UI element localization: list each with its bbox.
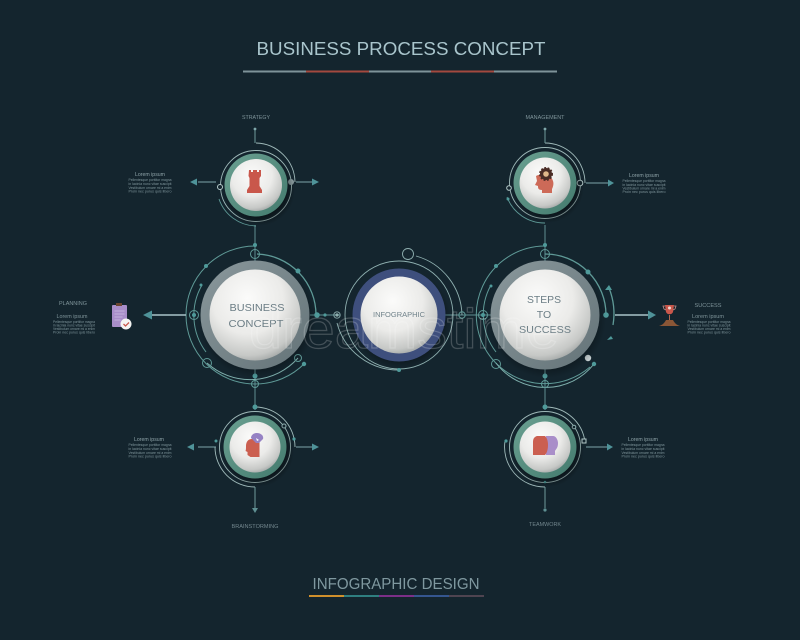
green ring [514, 152, 576, 214]
text block: planning: PLANNING [59, 301, 87, 307]
node: infographic [323, 248, 462, 372]
green ring [224, 154, 288, 216]
sphere [230, 422, 280, 472]
label [228, 302, 284, 330]
orbit rings [505, 407, 585, 487]
text block: brainstorming: Lorem ipsum [134, 437, 164, 443]
text block: success: SUCCESS [694, 303, 722, 309]
icon: head with gear [535, 168, 553, 193]
sphere [520, 158, 570, 208]
sphere [500, 270, 590, 360]
sphere [210, 270, 300, 360]
text block: brainstorming: in lacinia nunc vitae suscipit [128, 447, 172, 451]
text block: planning: Pellentesque porttitor magna [53, 320, 95, 324]
orbit rings [459, 246, 614, 388]
text block: planning: in lacinia nunc vitae suscipit [53, 324, 95, 328]
label: brainstorming: BRAINSTORMING [232, 524, 278, 530]
orbit dots [192, 243, 320, 378]
text block: management: Proin nec purus quis libero [622, 190, 666, 194]
text block: planning [53, 301, 95, 334]
footer heading: INFOGRAPHIC DESIGN [312, 576, 480, 593]
title: BUSINESS PROCESS CONCEPT [256, 38, 546, 59]
orbit rings [186, 246, 316, 388]
ring markers [542, 404, 548, 410]
text block: success: Vestibulum ornare mi a enim [688, 327, 731, 331]
stems and arrows [543, 444, 613, 512]
text block: teamwork: Lorem ipsum [628, 437, 658, 443]
icon: two heads [533, 436, 558, 455]
label: BUSINESS [230, 302, 284, 314]
arrow [586, 180, 614, 186]
text block: teamwork: Pellentesque porttitor magna [622, 443, 665, 447]
node: teamwork [504, 404, 613, 512]
label: SUCCESS [519, 324, 571, 336]
green ring [224, 416, 286, 478]
label: CONCEPT [228, 318, 284, 330]
node: strategy [190, 128, 319, 226]
text block: strategy [128, 172, 172, 194]
text block: planning: Proin nec purus quis libero [53, 330, 95, 334]
text block: management: in lacinia nunc vitae suscipit [622, 183, 666, 187]
text block: brainstorming [128, 437, 172, 458]
label: strategy: STRATEGY [242, 115, 270, 121]
text block: success: Pellentesque porttitor magna [688, 320, 731, 324]
label: INFOGRAPHIC [373, 310, 426, 319]
text block: teamwork: Vestibulum ornare mi a enim [622, 451, 665, 455]
text block: strategy: Proin nec purus quis libero [128, 190, 172, 194]
node: management [506, 128, 614, 223]
sphere [230, 159, 282, 211]
orbit rings [507, 143, 585, 223]
text block: teamwork: in lacinia nunc vitae suscipit [622, 447, 665, 451]
text block: strategy: in lacinia nunc vitae suscipit [128, 182, 172, 186]
stems and arrows [187, 444, 319, 513]
connector lines [255, 225, 545, 410]
node: business concept [143, 243, 320, 388]
icon: planning clipboard [112, 303, 132, 330]
text block: planning: Lorem ipsum [56, 314, 88, 320]
text block: success: in lacinia nunc vitae suscipit [688, 324, 731, 328]
orbit dots [323, 313, 401, 372]
text block: management [622, 173, 666, 194]
label [519, 294, 571, 336]
right arrow [615, 310, 656, 320]
watermark: dreamstime [249, 297, 559, 360]
ring markers [252, 404, 258, 410]
label: management: MANAGEMENT [526, 115, 565, 121]
pale marker [585, 355, 591, 361]
text block: success: Lorem ipsum [692, 314, 724, 320]
text block: brainstorming: Vestibulum ornare mi a enim [128, 451, 172, 455]
ring markers [218, 184, 222, 190]
green ring [514, 416, 576, 478]
orbit rings [334, 248, 462, 370]
text block: brainstorming: Proin nec purus quis libero [128, 454, 172, 458]
text block: strategy: Lorem ipsum [135, 172, 165, 178]
text block: brainstorming: Pellentesque porttitor magna [128, 443, 172, 447]
text block: management: Vestibulum ornare mi a enim [622, 186, 666, 190]
sphere [360, 276, 438, 354]
orbit rings [215, 407, 295, 487]
text block: planning: Vestibulum ornare mi a enim [53, 327, 95, 331]
text block: management: Pellentesque porttitor magna [622, 179, 666, 183]
node: steps to success [459, 243, 656, 388]
text block: success: Proin nec purus quis libero [688, 330, 731, 334]
blue ring [352, 268, 446, 362]
label: STEPS [527, 294, 561, 306]
text block: success [688, 303, 731, 334]
gray ring [490, 260, 600, 370]
text block: strategy: Pellentesque porttitor magna [128, 178, 172, 182]
text block: teamwork: Proin nec purus quis libero [622, 454, 665, 458]
ring markers [577, 180, 583, 186]
text block: strategy: Vestibulum ornare mi a enim [128, 186, 172, 190]
up stem [544, 128, 546, 143]
icon: chess rook [247, 170, 262, 193]
label: teamwork: TEAMWORK [529, 522, 561, 528]
text block: management: Lorem ipsum [629, 173, 659, 179]
orbit rings [219, 143, 295, 226]
left arrow [143, 310, 186, 320]
up stem [254, 128, 256, 143]
icon: head with idea [246, 433, 263, 457]
text block: teamwork [622, 437, 665, 458]
arrows [190, 178, 319, 186]
label: TO [537, 309, 551, 321]
icon: success trophy [659, 305, 680, 326]
sphere [520, 422, 570, 472]
node: brainstorming [187, 404, 319, 513]
gray ring [200, 260, 310, 370]
orbit dots [481, 243, 613, 378]
